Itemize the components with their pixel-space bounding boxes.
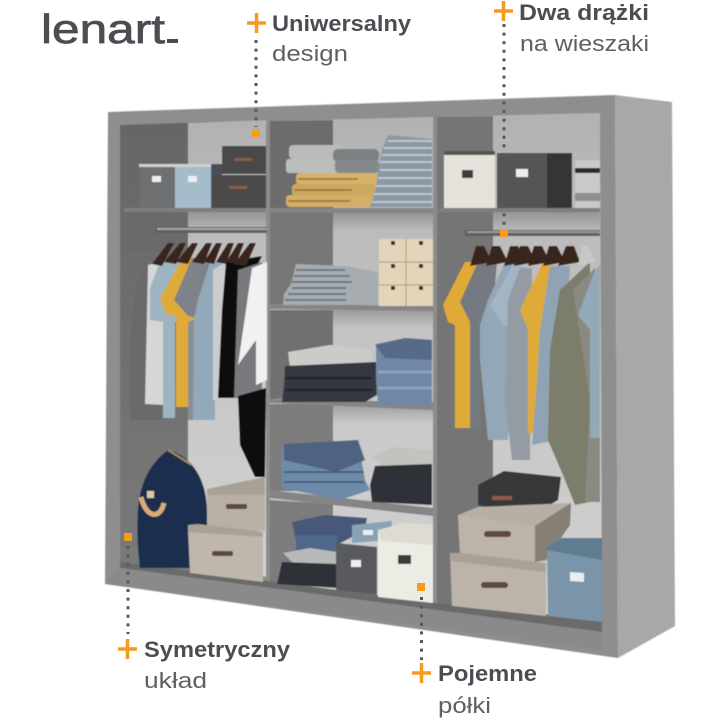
boxes right bottom bbox=[450, 471, 602, 622]
callout: Pojemne półki: Pojemne bbox=[438, 661, 537, 686]
wardrobe side panel bbox=[615, 95, 675, 658]
folded clothes second shelf bbox=[283, 264, 378, 305]
clothes rail bbox=[155, 227, 267, 233]
wardrobe front frame bbox=[105, 95, 618, 658]
callout: Symetryczny układ bbox=[118, 533, 291, 693]
logo: lenart bbox=[41, 6, 166, 52]
left compartment interior bbox=[120, 120, 267, 577]
right compartment interior bbox=[435, 113, 602, 624]
callout: Pojemne półki: półki bbox=[438, 693, 491, 718]
dividers bbox=[266, 117, 437, 608]
folded clothes top middle bbox=[286, 135, 432, 207]
hangers bbox=[152, 243, 256, 266]
callout: Uniwersalny design: Uniwersalny bbox=[272, 11, 412, 36]
callout: Dwa drążki na wieszaki bbox=[494, 0, 649, 237]
callout: Uniwersalny design bbox=[247, 11, 412, 137]
bottom middle clothes and boxes bbox=[277, 515, 433, 603]
folded clothes fourth shelf bbox=[281, 440, 432, 505]
wardrobe bbox=[105, 95, 675, 658]
floor bbox=[105, 562, 602, 650]
middle compartment interior bbox=[270, 117, 433, 607]
clothes rail bbox=[465, 230, 600, 236]
left hanging clothes bbox=[129, 227, 267, 477]
navy bag bbox=[137, 450, 207, 568]
drawers organiser bbox=[379, 239, 433, 306]
right hanging clothes bbox=[443, 230, 600, 505]
hangers bbox=[470, 246, 580, 266]
callout: Dwa drążki na wieszaki: Dwa drążki bbox=[519, 0, 649, 25]
callout: Pojemne półki bbox=[412, 583, 537, 718]
shelves bbox=[124, 208, 600, 516]
boxes top left bbox=[139, 146, 266, 208]
folded clothes third shelf bbox=[282, 338, 432, 406]
callout: Symetryczny układ: Symetryczny bbox=[144, 637, 291, 662]
boxes top right bbox=[444, 151, 600, 208]
callout: Uniwersalny design: design bbox=[272, 41, 348, 66]
beige boxes left bbox=[188, 477, 265, 582]
callout: Dwa drążki na wieszaki: na wieszaki bbox=[520, 31, 649, 56]
callout: Symetryczny układ: układ bbox=[144, 668, 207, 693]
